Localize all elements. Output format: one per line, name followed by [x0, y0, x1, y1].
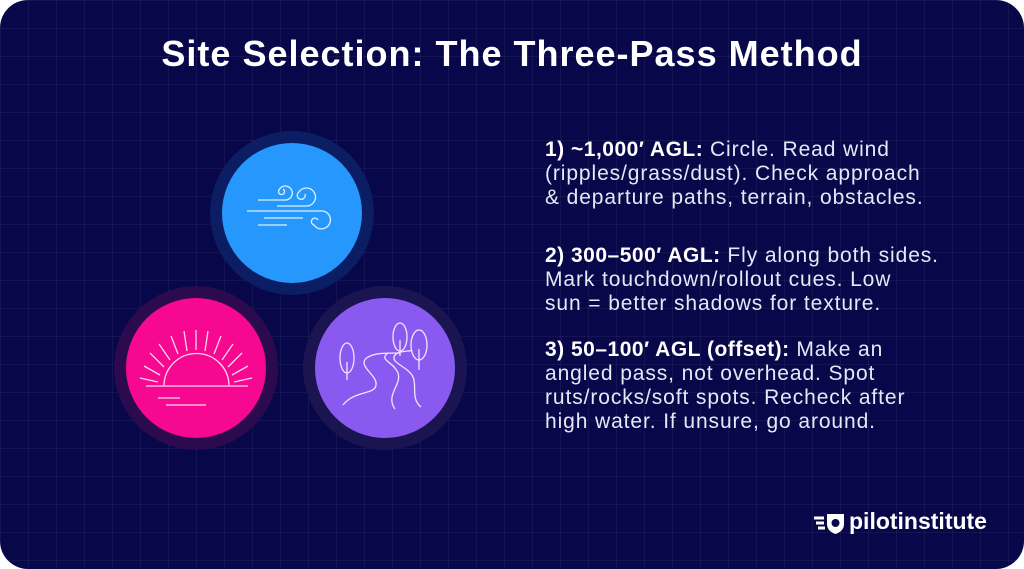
text block: pass 3: 3) 50–100′ AGL (offset): Make an [545, 338, 883, 361]
icon: wind circle [210, 131, 374, 295]
title: Site Selection: The Three-Pass Method [161, 33, 863, 74]
text block: pass 3: angled pass, not overhead. Spot [545, 362, 875, 385]
text block: pass 2: Mark touchdown/rollout cues. Low [545, 268, 891, 291]
text block: pass 1: (ripples/grass/dust). Check approach [545, 162, 921, 185]
text block: pass 1 [545, 138, 924, 209]
text block: pass 3: high water. If unsure, go around. [545, 410, 876, 433]
text block: pass 2: sun = better shadows for texture. [545, 292, 881, 315]
text block: pass 3 [545, 338, 905, 433]
text block: pass 2 [545, 244, 939, 315]
text block: pass 1: & departure paths, terrain, obstacles. [545, 186, 924, 209]
text block: pass 3: ruts/rocks/soft spots. Recheck after [545, 386, 905, 409]
text block: pass 1: 1) ~1,000′ AGL: Circle. Read wind [545, 138, 890, 161]
text block: pass 2: 2) 300–500′ AGL: Fly along both sides. [545, 244, 939, 267]
icon: landscape circle [303, 286, 467, 450]
icon: sunrise circle [114, 286, 278, 450]
logo: pilotinstitute [849, 508, 987, 534]
